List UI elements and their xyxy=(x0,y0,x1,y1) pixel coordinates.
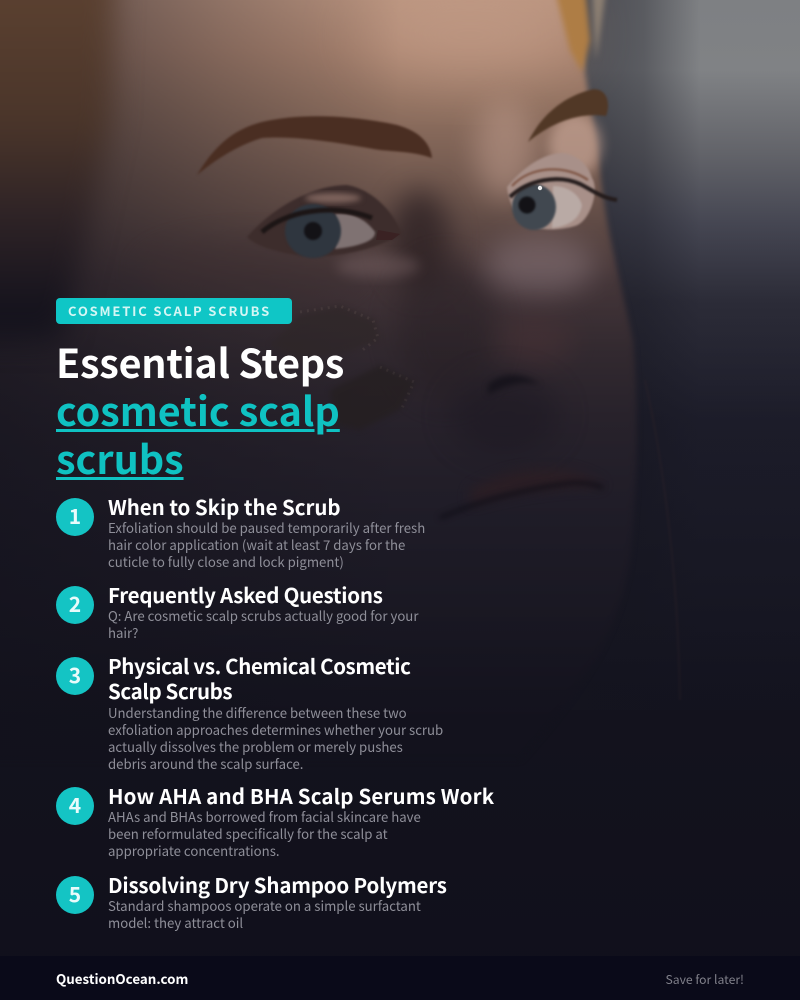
nose and cheek shading xyxy=(390,190,450,290)
step 1 text: Exfoliation should be paused temporarily after fresh xyxy=(108,518,425,537)
step 3 number xyxy=(56,657,94,695)
step 1 xyxy=(56,491,425,571)
step 3 heading xyxy=(108,650,411,705)
step 3 text xyxy=(108,703,443,773)
step 3 text: actually dissolves the problem or merely pushes xyxy=(108,737,403,756)
step 3 xyxy=(56,650,443,773)
step 4 number: 4 xyxy=(69,790,81,820)
category tag xyxy=(56,298,292,324)
face xyxy=(0,0,637,760)
brows xyxy=(197,116,432,175)
footer bar xyxy=(0,956,800,1000)
step 4 text: appropriate concentrations. xyxy=(108,841,280,860)
step 2 number: 2 xyxy=(69,589,81,619)
step 1 number: 1 xyxy=(69,501,81,531)
step 1 text xyxy=(108,518,425,571)
step 5 number xyxy=(56,876,94,914)
step 2 text: hair? xyxy=(108,623,138,642)
step 5 text: Standard shampoos operate on a simple surfactant xyxy=(108,896,421,915)
step 5 xyxy=(56,869,447,932)
left eye xyxy=(247,185,402,258)
step 4 text: been reformulated specifically for the scalp at xyxy=(108,824,388,843)
step 2 text: Q: Are cosmetic scalp scrubs actually good for your xyxy=(108,606,418,625)
step 5 heading: Dissolving Dry Shampoo Polymers xyxy=(108,869,447,899)
right eye xyxy=(507,153,617,230)
title: cosmetic scalp xyxy=(56,381,340,438)
step 1 text: cuticle to fully close and lock pigment) xyxy=(108,552,344,571)
scrub on cheek xyxy=(270,305,415,430)
step 2 text xyxy=(108,606,418,642)
step 4 heading: How AHA and BHA Scalp Serums Work xyxy=(108,780,494,810)
step 4 number xyxy=(56,787,94,825)
step 2 heading: Frequently Asked Questions xyxy=(108,579,383,609)
shading overlays xyxy=(0,250,800,1000)
step 3 number: 3 xyxy=(69,660,81,690)
step 3 heading: Scalp Scrubs xyxy=(108,675,232,705)
hair strand right of face xyxy=(645,380,680,700)
title xyxy=(56,333,344,486)
step 1 text: hair color application (wait at least 7 days for the xyxy=(108,535,405,554)
title: Essential Steps xyxy=(56,333,344,390)
step 3 text: exfoliation approaches determines whether your scrub xyxy=(108,720,443,739)
step 1 heading: When to Skip the Scrub xyxy=(108,491,341,521)
step 4 xyxy=(56,780,494,860)
step 2 xyxy=(56,579,418,642)
step 5 text xyxy=(108,896,421,932)
step 3 text: debris around the scalp surface. xyxy=(108,754,303,773)
step 4 text: AHAs and BHAs borrowed from facial skincare have xyxy=(108,807,421,826)
step 3 text: Understanding the difference between these two xyxy=(108,703,407,722)
title: scrubs xyxy=(56,429,184,486)
category tag: COSMETIC SCALP SCRUBS xyxy=(68,301,271,320)
step 2 number xyxy=(56,586,94,624)
footer brand: QuestionOcean.com xyxy=(56,969,188,988)
step 5 number: 5 xyxy=(69,879,81,909)
footer call to action: Save for later! xyxy=(665,970,744,988)
lips xyxy=(440,469,605,518)
step 4 text xyxy=(108,807,421,860)
hair xyxy=(0,0,115,340)
step 5 text: model: they attract oil xyxy=(108,913,243,932)
step 1 number xyxy=(56,498,94,536)
step 3 heading: Physical vs. Chemical Cosmetic xyxy=(108,650,411,680)
